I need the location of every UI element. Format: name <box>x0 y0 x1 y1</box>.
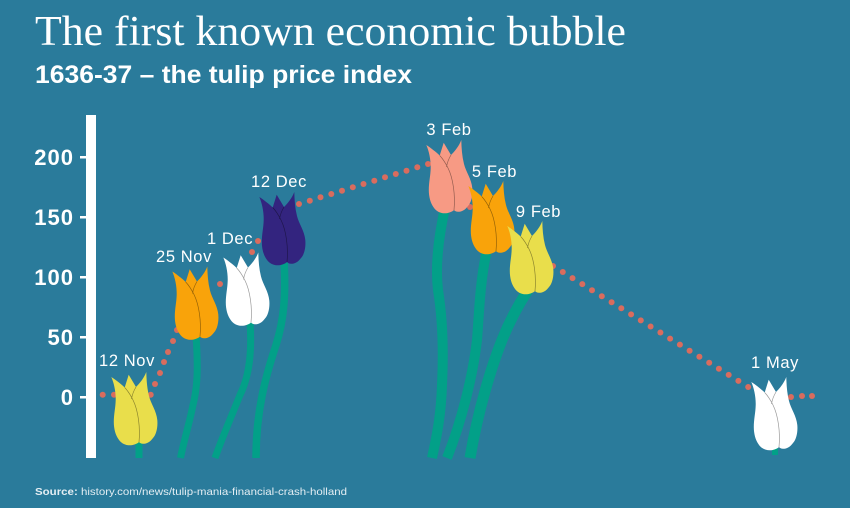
y axis: 0 <box>61 385 74 410</box>
y axis: 100 <box>34 265 74 290</box>
tulip: 12 Dec: 12 Dec <box>251 173 307 191</box>
tulip: 5 Feb: 5 Feb <box>472 163 517 181</box>
tulip: 9 Feb <box>470 203 561 458</box>
source: Source: history.com/news/tulip-mania-financial-crash-holland <box>35 486 347 498</box>
y axis: 150 <box>34 205 74 230</box>
tulip: 12 Nov: 12 Nov <box>99 352 155 370</box>
tulip: 9 Feb: 9 Feb <box>516 203 561 221</box>
tulip: 1 May <box>751 354 799 455</box>
title: The first known economic bubble <box>35 9 626 55</box>
tulip: 1 Dec: 1 Dec <box>207 230 253 248</box>
tulip: 1 Dec <box>207 230 269 458</box>
tulip: 3 Feb: 3 Feb <box>426 121 472 139</box>
tulip: 12 Dec <box>251 173 307 458</box>
tulip: 25 Nov: 25 Nov <box>156 248 212 266</box>
subtitle: 1636-37 – the tulip price index <box>35 61 412 89</box>
y axis <box>34 115 96 458</box>
tulip: 25 Nov <box>156 248 218 458</box>
tulip: 5 Feb <box>447 163 517 458</box>
y axis: 50 <box>48 325 74 350</box>
tulip: 3 Feb <box>426 121 472 458</box>
dotted price line <box>100 161 815 400</box>
tulip: 12 Nov <box>99 352 157 458</box>
tulip: 1 May: 1 May <box>751 354 799 372</box>
y axis: 200 <box>34 145 74 170</box>
